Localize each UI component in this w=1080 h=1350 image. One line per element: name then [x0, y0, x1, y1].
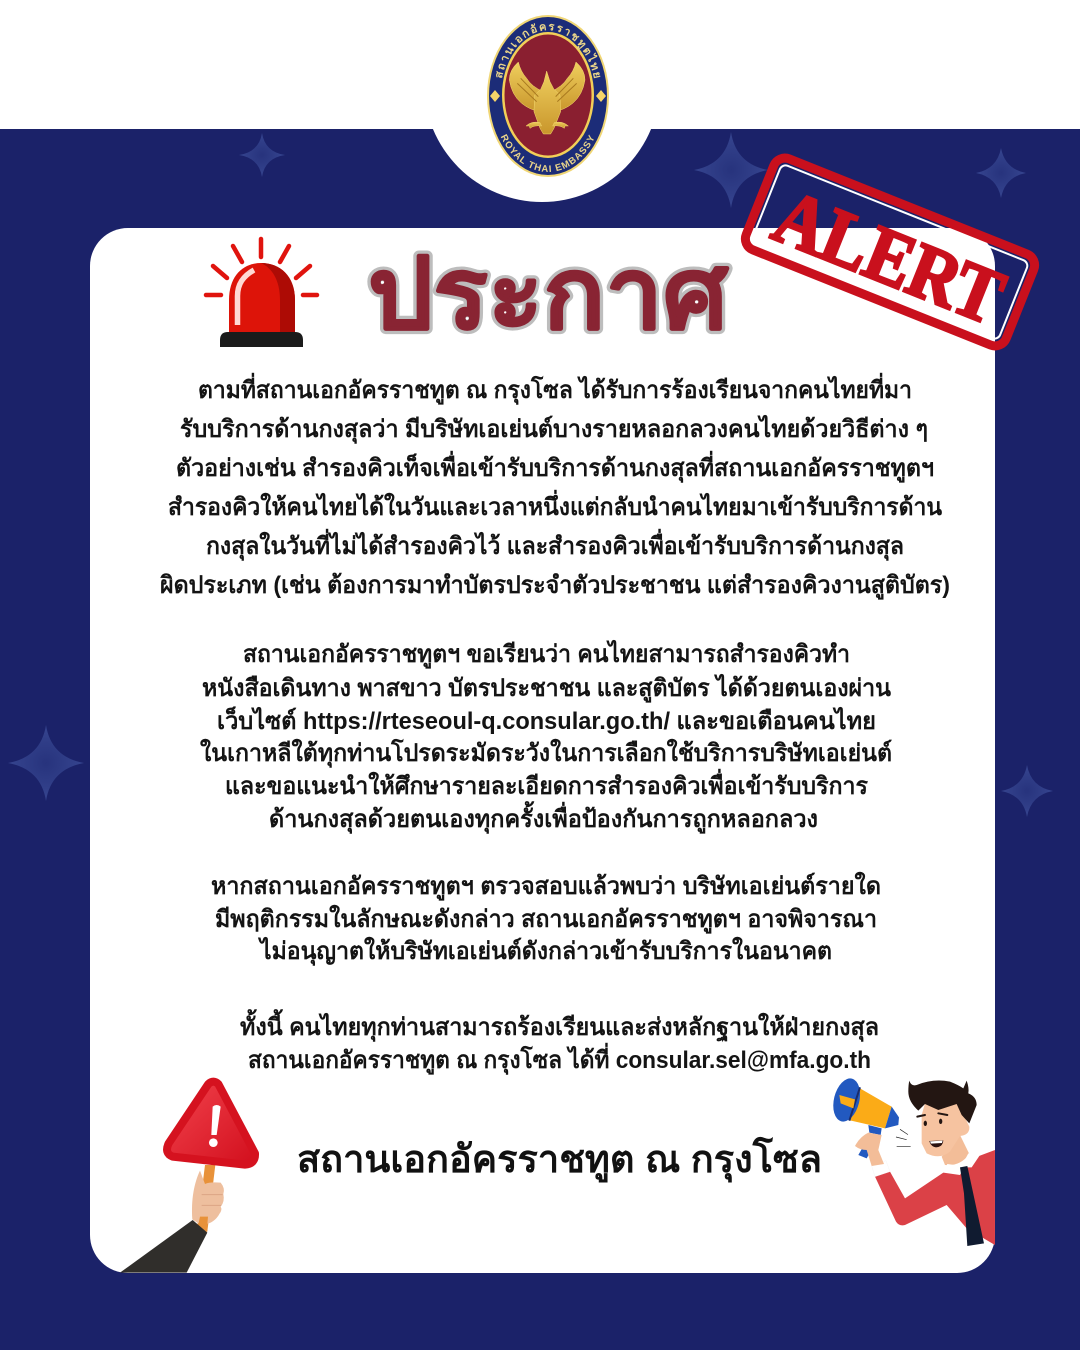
siren rays: [206, 239, 317, 295]
title: ประกาศ: ประกาศ: [368, 238, 730, 350]
text block: complaint summary: สำรองคิวให้คนไทยได้ในวันและเวลาหนึ่งแต่กลับนำคนไทยมาเข้ารับบริการด้าน: [168, 489, 943, 521]
siren base: [220, 332, 303, 347]
text block: self-booking advice: หนังสือเดินทาง พาสขาว บัตรประชาชน และสูติบัตร ได้ด้วยตนเองผ่าน: [202, 673, 892, 703]
title: ประกาศ: ประกาศ: [368, 238, 730, 350]
stick below fist: [197, 1217, 208, 1233]
text block: complaint summary: ตัวอย่างเช่น สำรองคิวเท็จเพื่อเข้ารับบริการด้านกงสุลที่สถานเอกอัครราชทูตฯ: [176, 450, 934, 484]
megaphone: [829, 1076, 899, 1158]
hair: [908, 1081, 977, 1123]
hand on megaphone: [855, 1133, 884, 1166]
warning triangle: [167, 1082, 255, 1165]
alert stamp: [742, 155, 1038, 349]
neck and face: [942, 1135, 969, 1165]
text block: complaint summary: [160, 372, 950, 600]
header: white band: [0, 0, 1080, 129]
shirt: [875, 1150, 995, 1245]
text block: complaint summary: ตามที่สถานเอกอัครราชทูต ณ กรุงโซล ได้รับการร้องเรียนจากคนไทยที่มา: [198, 372, 912, 406]
text block: contact: สถานเอกอัครราชทูต ณ กรุงโซล ได้ที่ consular.sel@mfa.go.th: [248, 1042, 871, 1076]
text block: agent warning: หากสถานเอกอัครราชทูตฯ ตรวจสอบแล้วพบว่า บริษัทเอเย่นต์รายใด: [211, 871, 881, 901]
decorative stars: [8, 132, 1053, 817]
text block: complaint summary: ผิดประเภท (เช่น ต้องการมาทำบัตรประจำตัวประชาชน แต่สำรองคิวงานสูติบัตร): [160, 572, 950, 600]
emblem: English arc text: ROYAL THAI EMBASSY: [500, 134, 594, 172]
text block: self-booking advice: และขอแนะนำให้ศึกษารายละเอียดการสำรองคิวเพื่อเข้ารับบริการ: [225, 768, 868, 800]
white content card: [90, 228, 995, 1273]
illustration: hand holding warning sign: [120, 1082, 255, 1273]
icon: red siren: [206, 239, 317, 347]
text block: self-booking advice: เว็บไซต์ https://rteseoul-q.consular.go.th/ และขอเตือนคนไทย: [217, 706, 876, 735]
emblem: garuda: [509, 62, 585, 134]
stamp word: ALERT: [763, 172, 1016, 341]
eyes and mouth: [917, 1113, 947, 1117]
sound lines: [896, 1129, 911, 1147]
emblem: Thai arc text: สถานเอกอัครราชทูตไทย: [496, 23, 600, 78]
text block: agent warning: [211, 871, 881, 967]
cuff: [872, 1161, 890, 1177]
text block: complaint summary: รับบริการด้านกงสุลว่า มีบริษัทเอเย่นต์บางรายหลอกลวงคนไทยด้วยวิธีต่าง ๆ: [180, 414, 928, 445]
text block: agent warning: ไม่อนุญาตให้บริษัทเอเย่นต์ดังกล่าวเข้ารับบริการในอนาคต: [257, 936, 832, 967]
text block: contact: [240, 1008, 879, 1076]
text block: self-booking advice: ด้านกงสุลด้วยตนเองทุกครั้งเพื่อป้องกันการถูกหลอกลวง: [269, 800, 818, 835]
sleeve: [120, 1220, 207, 1273]
text block: self-booking advice: สถานเอกอัครราชทูตฯ ขอเรียนว่า คนไทยสามารถสำรองคิวทำ: [243, 639, 850, 669]
text block: self-booking advice: ในเกาหลีใต้ทุกท่านโปรดระมัดระวังในการเลือกใช้บริการบริษัทเอเย่นต์: [200, 738, 892, 769]
stamp frame: [742, 155, 1038, 349]
tie: [960, 1166, 984, 1246]
text block: contact: ทั้งนี้ คนไทยทุกท่านสามารถร้องเรียนและส่งหลักฐานให้ฝ่ายกงสุล: [240, 1008, 879, 1043]
hand: [192, 1171, 224, 1224]
text block: self-booking advice: [200, 639, 892, 835]
header: white semicircle notch: [424, 0, 660, 202]
exclamation mark: [211, 1105, 221, 1135]
text block: complaint summary: กงสุลในวันที่ไม่ได้สำรองคิวไว้ และสำรองคิวเพื่อเข้ารับบริการด้านกงสุล: [206, 528, 904, 562]
signature: embassy name: สถานเอกอัครราชทูต ณ กรุงโซล: [297, 1136, 822, 1183]
illustration: man with megaphone: [829, 1076, 995, 1246]
collar: [943, 1153, 980, 1173]
text block: agent warning: มีพฤติกรรมในลักษณะดังกล่าว สถานเอกอัครราชทูตฯ อาจพิจารณา: [215, 904, 877, 934]
siren dome: [229, 263, 295, 332]
emblem: Royal Thai Embassy seal: [487, 15, 609, 177]
sign stick: [197, 1165, 215, 1232]
emblem: side diamonds: [490, 90, 606, 102]
